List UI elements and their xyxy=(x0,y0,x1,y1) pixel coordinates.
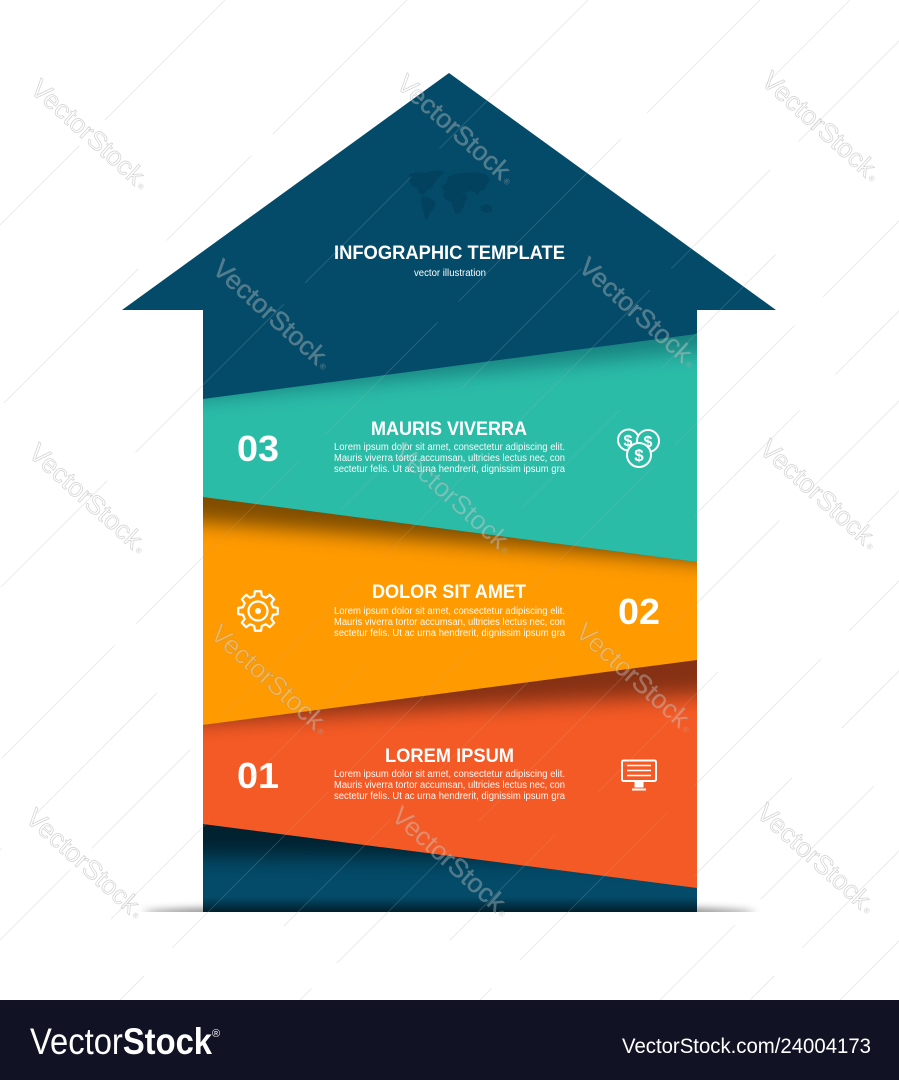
footer url: VectorStock.com/24004173 xyxy=(622,1035,871,1058)
text block: lorem ipsum: sectetur felis. Ut ac urna hendrerit, dignissim ipsum gra xyxy=(334,791,565,802)
number 02: 02 xyxy=(618,591,660,632)
number 01: 01 xyxy=(237,755,279,796)
floor shadow xyxy=(142,902,756,912)
text block: mauris viverra: sectetur felis. Ut ac urna hendrerit, dignissim ipsum gra xyxy=(334,464,565,475)
watermarks: VectorStock xyxy=(386,800,512,918)
watermarks: VectorStock xyxy=(389,437,515,555)
text block: mauris viverra xyxy=(334,442,565,475)
watermarks: VectorStock xyxy=(20,802,146,920)
watermarks: VectorStock xyxy=(573,251,699,369)
watermarks: VectorStock xyxy=(205,618,331,736)
footer bar xyxy=(0,1000,899,1080)
watermarks: ® xyxy=(499,545,510,556)
text block: dolor sit amet: sectetur felis. Ut ac urna hendrerit, dignissim ipsum gra xyxy=(334,628,565,639)
watermarks: ® xyxy=(496,908,507,919)
icon: coins: $ xyxy=(634,446,644,465)
heading: lorem ipsum: LOREM IPSUM xyxy=(385,746,514,767)
watermarks: VectorStock xyxy=(207,253,333,371)
watermarks: ® xyxy=(317,361,328,372)
title xyxy=(334,243,565,279)
heading: dolor sit amet: DOLOR SIT AMET xyxy=(372,582,526,603)
text block: dolor sit amet: Mauris viverra tortor accumsan, ultricies lectus nec, con xyxy=(334,617,565,628)
icon: monitor xyxy=(622,760,656,790)
watermarks: VectorStock xyxy=(754,433,880,551)
footer bar: ® xyxy=(212,1028,220,1040)
icon: coins: $ xyxy=(644,434,653,451)
watermarks: ® xyxy=(866,173,877,184)
watermarks: ® xyxy=(315,726,326,737)
title: INFOGRAPHIC TEMPLATE xyxy=(334,243,565,264)
panel: mauris viverra xyxy=(203,334,697,562)
text block: dolor sit amet xyxy=(334,606,565,639)
watermarks: VectorStock xyxy=(751,797,877,915)
arrow house body xyxy=(122,73,776,912)
title: vector illustration xyxy=(414,268,486,279)
watermarks: ® xyxy=(130,910,141,921)
watermarks: VectorStock xyxy=(570,616,696,734)
panel: navy base xyxy=(203,824,697,912)
text block: mauris viverra: Mauris viverra tortor accumsan, ultricies lectus nec, con xyxy=(334,453,565,464)
watermarks: ® xyxy=(135,181,146,192)
heading: mauris viverra: MAURIS VIVERRA xyxy=(371,419,527,440)
text block: lorem ipsum: Lorem ipsum dolor sit amet, consectetur adipiscing elit. xyxy=(334,769,565,780)
watermarks xyxy=(20,65,888,925)
panel: lorem ipsum xyxy=(203,660,697,888)
text block: lorem ipsum: Mauris viverra tortor accumsan, ultricies lectus nec, con xyxy=(334,780,565,791)
text block: dolor sit amet: Lorem ipsum dolor sit amet, consectetur adipiscing elit. xyxy=(334,606,565,617)
watermarks: VectorStock xyxy=(391,68,517,186)
footer logo: VectorStock xyxy=(30,1021,212,1062)
number 03: 03 xyxy=(237,428,279,469)
icon: coins: $ xyxy=(624,433,633,450)
icon: gear xyxy=(238,591,278,631)
watermarks: ® xyxy=(133,545,144,556)
panel: dolor sit amet xyxy=(203,497,697,725)
icon: coins xyxy=(618,430,659,467)
watermarks: VectorStock xyxy=(23,437,149,555)
watermarks: ® xyxy=(680,724,691,735)
watermarks: ® xyxy=(501,176,512,187)
watermarks: VectorStock xyxy=(756,65,882,183)
world map xyxy=(409,170,492,220)
watermarks: ® xyxy=(861,905,872,916)
watermarks: VectorStock xyxy=(25,73,151,191)
text block: mauris viverra: Lorem ipsum dolor sit amet, consectetur adipiscing elit. xyxy=(334,442,565,453)
text block: lorem ipsum xyxy=(334,769,565,802)
watermarks: ® xyxy=(864,541,875,552)
watermarks: ® xyxy=(683,359,694,370)
